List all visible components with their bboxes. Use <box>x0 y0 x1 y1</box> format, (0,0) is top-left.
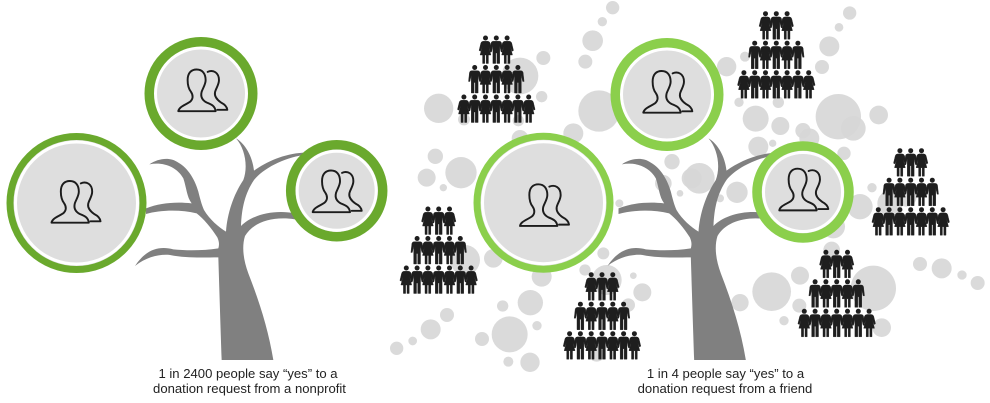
tree silhouette left <box>135 138 303 360</box>
large circle left <box>10 136 143 270</box>
caption: nonprofit: 1 in 2400 people say “yes” to a <box>158 366 338 381</box>
large circle right <box>477 136 610 269</box>
top circle right <box>616 43 718 146</box>
people group: lower right <box>798 250 876 337</box>
tree silhouette right <box>607 138 776 360</box>
right circle right <box>757 146 849 238</box>
caption: friend: 1 in 4 people say “yes” to a <box>647 366 805 381</box>
people group: bottom centre <box>563 272 641 359</box>
people group: far right <box>872 148 950 235</box>
caption: nonprofit: donation request from a nonprofit <box>153 381 346 396</box>
people group: upper left <box>458 36 535 122</box>
panel: nonprofit tree <box>10 42 383 396</box>
right circle left <box>291 145 383 237</box>
background bubbles behind right tree <box>390 1 985 372</box>
panel: friend tree <box>477 43 849 396</box>
people group: middle left <box>400 206 478 294</box>
caption: friend: donation request from a friend <box>638 381 812 396</box>
people group: top right <box>738 11 815 98</box>
top circle left <box>150 42 252 145</box>
